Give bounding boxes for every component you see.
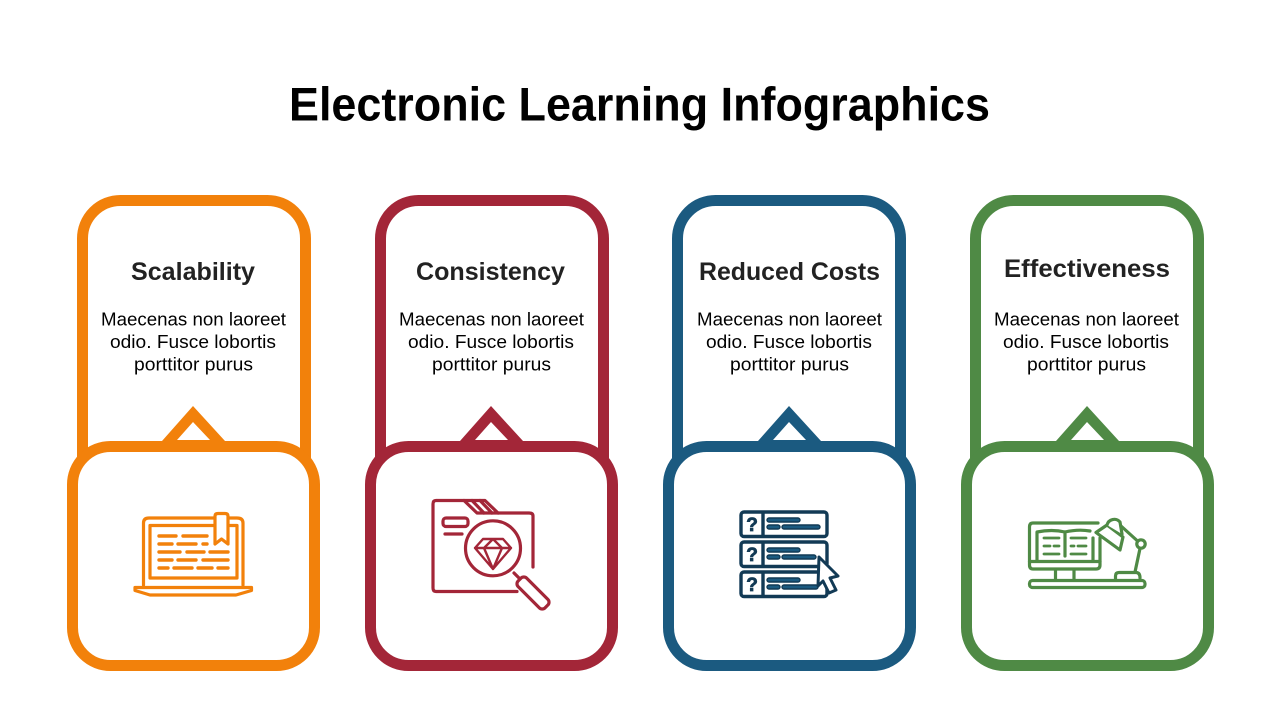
question marks: ?	[746, 515, 758, 536]
reduced costs text card	[678, 200, 900, 500]
icon: folder with magnifier and diamond	[433, 500, 551, 611]
effectiveness description: porttitor purus	[1027, 354, 1146, 374]
icon: desktop with book and lamp	[1030, 519, 1145, 588]
panel: scalability	[72, 200, 314, 666]
panel: reduced costs	[668, 200, 910, 666]
effectiveness text card	[976, 200, 1198, 500]
scalability description: odio. Fusce lobortis	[110, 332, 276, 352]
row bar highlights	[769, 520, 818, 587]
row bars	[769, 520, 818, 587]
scalability icon card	[72, 446, 314, 666]
reduced costs icon card	[668, 446, 910, 666]
consistency text card	[380, 200, 604, 500]
effectiveness description: Maecenas non laoreet	[994, 310, 1179, 330]
effectiveness description	[994, 310, 1179, 374]
icon: laptop with bookmark	[135, 514, 252, 595]
cursor	[818, 557, 838, 593]
question marks: ?	[746, 545, 758, 566]
question marks: ?	[746, 575, 758, 596]
scalability text card	[82, 200, 306, 500]
consistency description: Maecenas non laoreet	[399, 310, 584, 330]
consistency pointer	[460, 406, 523, 441]
reduced costs description: odio. Fusce lobortis	[706, 332, 872, 352]
scalability description	[101, 310, 286, 374]
consistency icon card	[370, 446, 612, 666]
effectiveness description: odio. Fusce lobortis	[1003, 332, 1169, 352]
reduced costs description	[697, 310, 882, 374]
effectiveness icon card	[966, 446, 1208, 666]
question marks	[746, 515, 758, 596]
panel: effectiveness	[966, 200, 1208, 666]
scalability heading: Scalability	[131, 258, 255, 286]
consistency description: odio. Fusce lobortis	[408, 332, 574, 352]
scalability description: Maecenas non laoreet	[101, 310, 286, 330]
effectiveness pointer	[1056, 406, 1119, 441]
scalability pointer	[162, 406, 225, 441]
reduced costs description: porttitor purus	[730, 354, 849, 374]
server rows	[741, 512, 827, 596]
consistency heading: Consistency	[416, 258, 565, 286]
consistency description	[399, 310, 584, 374]
consistency description: porttitor purus	[432, 354, 551, 374]
title: Electronic Learning Infographics	[289, 78, 990, 130]
reduced costs description: Maecenas non laoreet	[697, 310, 882, 330]
reduced costs pointer	[758, 406, 821, 441]
scalability description: porttitor purus	[134, 354, 253, 374]
icon: question list with cursor	[741, 512, 838, 596]
effectiveness heading: Effectiveness	[1004, 255, 1170, 283]
panel: consistency	[370, 200, 612, 666]
reduced costs heading: Reduced Costs	[699, 258, 880, 286]
